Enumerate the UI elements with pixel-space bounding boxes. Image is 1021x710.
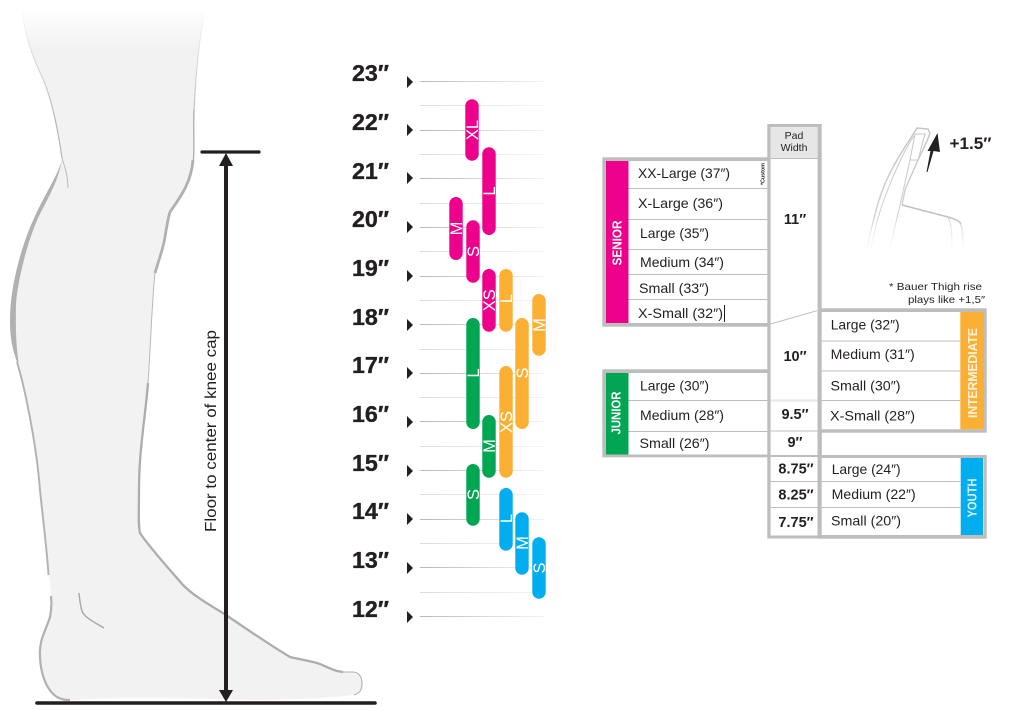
inch labels: 14″ (352, 498, 389, 524)
icon: thigh rise pad (867, 128, 963, 250)
senior sizes: X-Large (36″) (638, 195, 723, 211)
senior sizes: Large (35″) (640, 225, 709, 241)
intermediate sizes: X-Small (28″) (830, 408, 915, 424)
thigh rise note: * Bauer Thigh rise (889, 281, 982, 293)
leg illustration (10, 10, 362, 700)
inch labels: 22″ (352, 109, 389, 135)
pad width values: 7.75″ (778, 515, 814, 531)
junior sizes (640, 378, 724, 451)
panel: youth: YOUTH (966, 478, 980, 518)
panel: intermediate (818, 308, 987, 433)
pad width column (767, 124, 822, 538)
range pills: senior: M (448, 222, 466, 235)
height scale (352, 60, 545, 623)
junior sizes: Large (30″) (640, 378, 709, 394)
pad width values: 9.5″ (781, 407, 809, 423)
range pills: intermediate: L (498, 294, 516, 303)
pointer arrows (407, 76, 413, 623)
thigh rise note: plays like +1,5″ (908, 294, 985, 306)
pad width values (778, 212, 814, 531)
column dividers (771, 311, 818, 508)
intermediate sizes: Large (32″) (831, 316, 900, 332)
leg contour: shin and foot (193, 110, 194, 165)
range pills: intermediate: XS (498, 411, 516, 433)
range pills: youth: L (498, 514, 516, 523)
pad width values: 10″ (783, 349, 807, 365)
senior sizes: Medium (34″) (640, 254, 724, 270)
ankle crease (79, 593, 104, 628)
divider stub between intermediate and youth (818, 432, 822, 456)
panel: senior: *Custom (760, 163, 766, 185)
intermediate sizes (830, 316, 915, 424)
range pills: junior: S (465, 489, 483, 500)
range pills: intermediate: M (531, 318, 549, 332)
senior sizes: Small (33″) (639, 280, 709, 296)
range pills: senior: L (481, 186, 499, 196)
range pills: junior: L (465, 368, 483, 378)
range pills: intermediate (498, 269, 549, 478)
junior sizes: Medium (28″) (640, 407, 724, 423)
measurement label: Floor to center of knee cap (203, 330, 220, 532)
inch labels: 23″ (352, 60, 389, 86)
range pills: youth: S (531, 562, 549, 574)
panel: intermediate: INTERMEDIATE (966, 328, 980, 418)
inch labels: 18″ (352, 304, 389, 330)
range pills: junior: M (481, 439, 499, 453)
youth sizes: Medium (22″) (832, 486, 916, 502)
leg contour: back of leg (22, 10, 62, 158)
pad width column: Width (781, 142, 808, 154)
panel: junior: JUNIOR (610, 392, 624, 434)
junior sizes: Small (26″) (640, 435, 710, 451)
pad width values: 11″ (784, 212, 806, 228)
inch labels: 16″ (352, 401, 389, 427)
range pills: junior (465, 318, 499, 526)
panel: senior (602, 157, 770, 327)
panel: junior (602, 369, 770, 457)
range pills: youth (498, 488, 549, 599)
column heading: Pad (785, 130, 803, 142)
measurement arrow (37, 152, 375, 703)
youth sizes: Large (24″) (832, 461, 901, 477)
intermediate sizes: Small (30″) (830, 378, 900, 394)
range pills: youth: M (514, 536, 532, 550)
inch labels: 15″ (352, 450, 389, 476)
thigh rise note (889, 281, 985, 306)
arrow: thigh rise (926, 133, 940, 172)
panel: youth (818, 455, 987, 539)
inch labels: 12″ (352, 596, 389, 622)
range pills: senior: XL (464, 120, 482, 140)
scale rules (420, 81, 545, 617)
inch labels: 21″ (352, 158, 389, 184)
intermediate sizes: Medium (31″) (831, 346, 915, 362)
youth sizes (831, 461, 916, 528)
range pills: senior: S (465, 246, 483, 257)
senior sizes: X-Small (32″) (638, 305, 723, 321)
inch labels: 13″ (352, 547, 389, 573)
senior sizes: XX-Large (37″) (638, 165, 730, 181)
thigh rise value: +1.5″ (950, 135, 992, 153)
panel: senior: SENIOR (610, 220, 624, 266)
pad width values: 9″ (787, 435, 803, 451)
youth sizes: Small (20″) (831, 512, 901, 528)
range pills: senior (448, 99, 499, 332)
inch labels (352, 60, 389, 622)
inch labels: 19″ (352, 255, 389, 281)
inch labels: 20″ (352, 206, 389, 232)
range pills: senior: XS (481, 289, 499, 311)
inch labels: 17″ (352, 352, 389, 378)
senior sizes (638, 165, 730, 321)
pad width values: 8.75″ (778, 462, 814, 478)
pad width values: 8.25″ (778, 488, 814, 504)
range pills: intermediate: S (514, 367, 532, 379)
